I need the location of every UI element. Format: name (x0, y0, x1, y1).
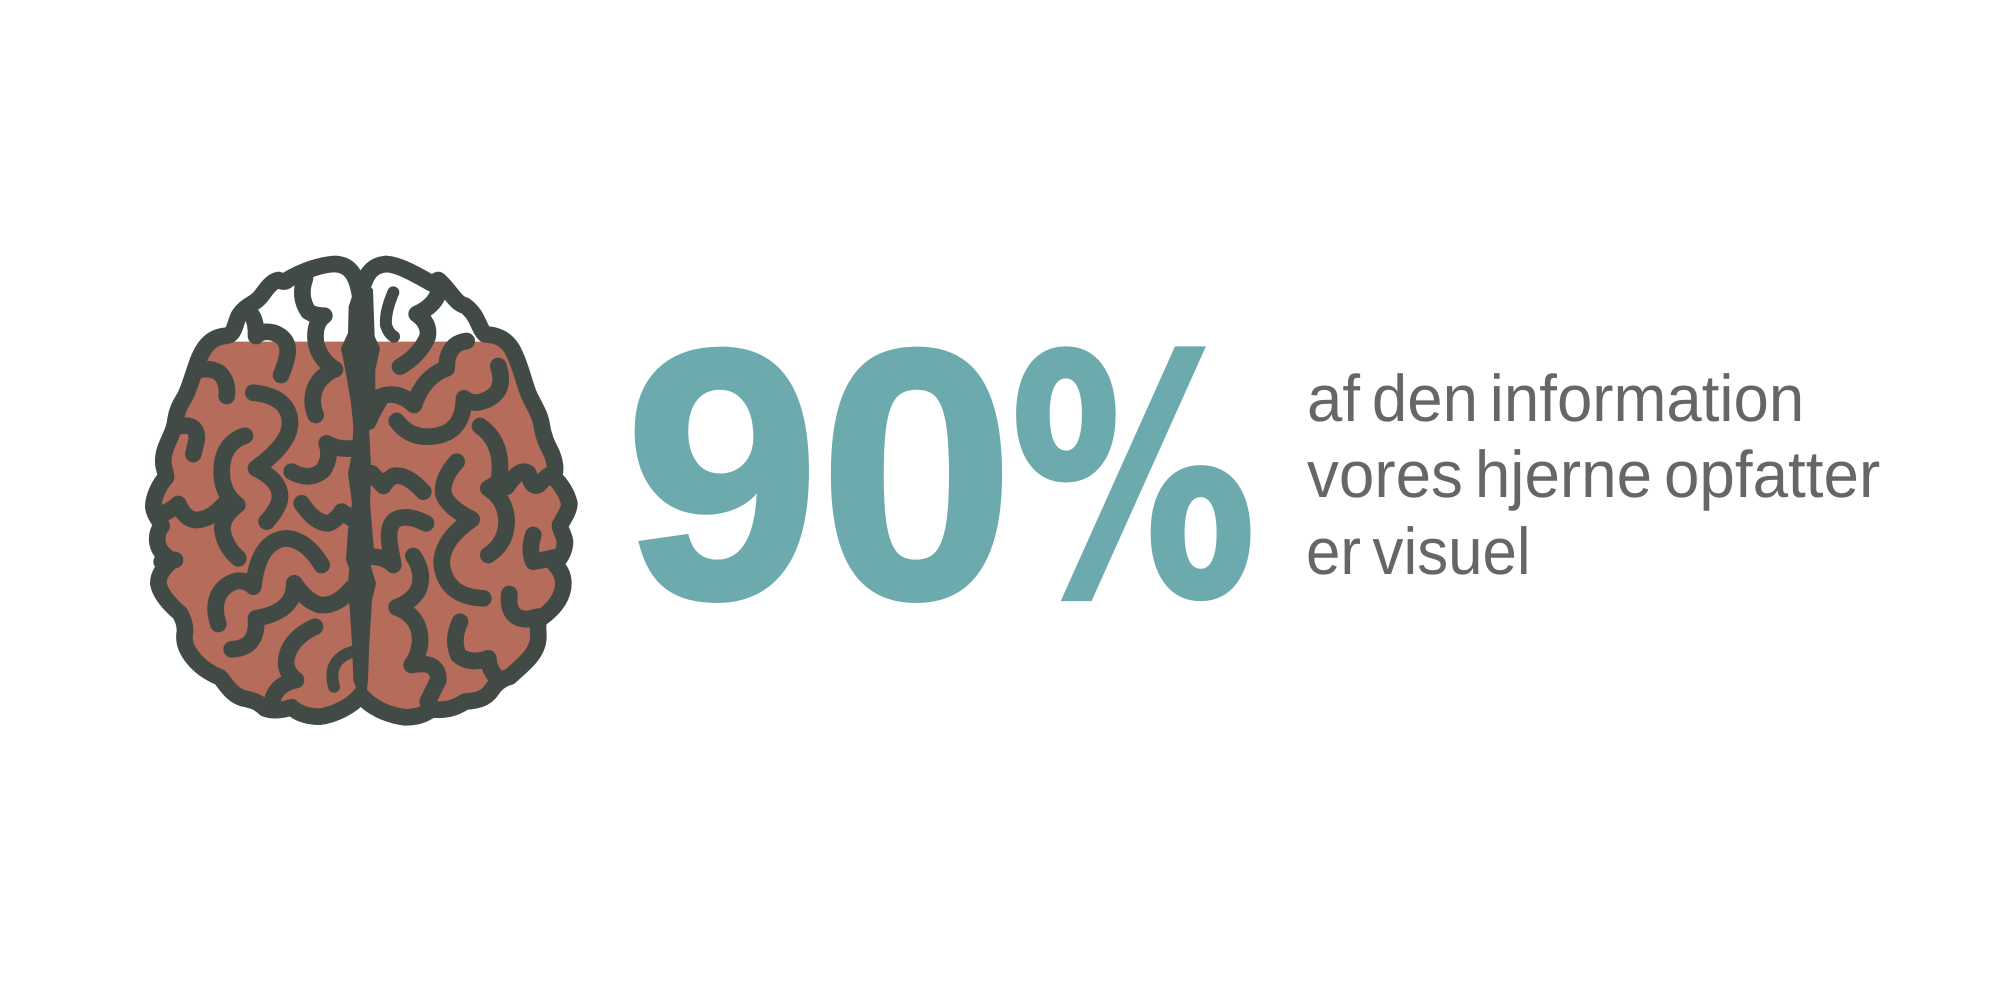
description text (1306, 361, 1880, 588)
statistic: 90% (625, 277, 1257, 673)
brain fill level (162, 342, 561, 709)
brain folds (158, 278, 555, 705)
digits 90: 90 (625, 277, 1014, 673)
line 3: er visuel (1306, 514, 1531, 588)
percent sign: % (1010, 288, 1257, 672)
icon: brain 90 percent filled (153, 264, 569, 717)
line 2: vores hjerne opfatter (1307, 437, 1880, 511)
line 1: af den information (1307, 361, 1804, 435)
brain outline (153, 264, 569, 717)
central fissure (342, 277, 379, 695)
